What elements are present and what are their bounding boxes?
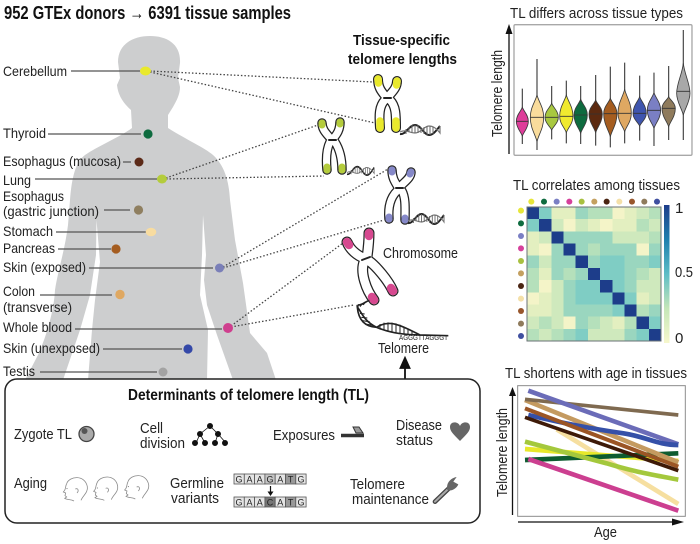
- icon: germline sequence change: G: [297, 474, 305, 484]
- DNA helix: purple chromosome: [408, 214, 444, 224]
- y axis: telomere length (violin): [490, 24, 512, 154]
- DNA helix: yellow chromosome: [400, 125, 440, 135]
- label: Aging: Aging: [14, 475, 47, 492]
- icon: heart: [450, 422, 470, 441]
- y axis: telomere length (violin): Telomere length: [490, 50, 506, 137]
- label: Stomach: Stomach: [3, 223, 53, 239]
- dotted connector lines: [150, 71, 388, 327]
- heatmap: [518, 199, 693, 347]
- label: Testis: Testis: [3, 363, 35, 379]
- heading: tissue-specific telomere lengths: [348, 33, 457, 68]
- icon: cigarette: [341, 427, 364, 436]
- tissue labels and markers: [3, 63, 233, 379]
- label: Cell division: [140, 420, 185, 452]
- icon: germline sequence change: A: [257, 474, 263, 484]
- y axis: telomere length (lines): Telomere length: [495, 408, 511, 497]
- label: Zygote TL: Zygote TL: [14, 426, 72, 443]
- x axis: age: [518, 518, 684, 541]
- heading: tissue-specific telomere lengths: telomere lengths: [348, 52, 457, 68]
- label: Lung: Lung: [3, 172, 31, 188]
- label: transverse: (transverse): [3, 299, 72, 315]
- icon: germline sequence change: G: [235, 474, 243, 484]
- colour bar labels: [675, 200, 693, 347]
- icon: germline sequence change: T: [288, 474, 294, 484]
- label: Telomere maintenance: maintenance: [352, 491, 429, 508]
- arrow: determinants to telomere: [400, 358, 410, 380]
- panel: determinants of telomere length: [5, 379, 480, 523]
- icon: germline sequence change: C: [267, 498, 274, 508]
- telomere sequence: AGGGTTAGGGT: [399, 335, 449, 342]
- DNA helix: lime chromosome: [347, 167, 374, 175]
- icon: zygote: [79, 426, 94, 442]
- colour bar: [664, 205, 670, 343]
- x axis: age: Age: [594, 524, 617, 541]
- label: gastric junction: (gastric junction): [3, 203, 99, 219]
- icon: germline sequence change: A: [246, 474, 253, 484]
- label: Telomere: Telomere: [378, 340, 429, 357]
- label: Skin (unexposed): Skin (unexposed): [3, 340, 100, 356]
- label: Germline variants: [170, 475, 224, 507]
- line chart: [518, 386, 685, 516]
- icon: germline sequence change: A: [277, 498, 283, 508]
- label: Telomere maintenance: Telomere: [350, 476, 405, 493]
- y axis: telomere length (lines): [495, 387, 516, 515]
- label: Disease status: status: [396, 432, 433, 449]
- icon: germline sequence change: G: [235, 498, 243, 508]
- label: Chromosome: Chromosome: [383, 245, 458, 262]
- icon: wrench: [435, 477, 458, 502]
- chromosome: purple: [389, 170, 411, 220]
- label: Disease status: Disease: [396, 417, 442, 434]
- label: Cerebellum: Cerebellum: [3, 63, 67, 79]
- icon: germline sequence change: A: [246, 498, 253, 508]
- label: Thyroid: Thyroid: [3, 125, 46, 141]
- label: Esophagus: Esophagus: [3, 188, 64, 204]
- chromosome: pink: [347, 233, 393, 300]
- icon: germline sequence change: T: [288, 498, 294, 508]
- label: Germline variants: variants: [171, 490, 219, 507]
- label: Cell division: Cell: [140, 420, 163, 437]
- icon: germline sequence change: [234, 474, 306, 508]
- colour legend dots: [518, 199, 660, 339]
- icon: germline sequence change: G: [297, 498, 305, 508]
- icon: cell division tree: [192, 423, 228, 446]
- label: Telomere maintenance: [350, 476, 429, 508]
- label: Esophagus (mucosa): Esophagus (mucosa): [3, 153, 121, 169]
- label: Whole blood: Whole blood: [3, 319, 72, 335]
- colour bar labels: 0.5: [675, 264, 693, 281]
- chromosome: yellow: [378, 79, 397, 128]
- title: violin chart: TL differs across tissue types: [510, 5, 683, 22]
- panel heading: Determinants of telomere length (TL): [128, 387, 369, 404]
- telomere helix: [357, 301, 448, 336]
- label: Germline variants: Germline: [170, 475, 224, 492]
- icon: germline sequence change: A: [257, 498, 263, 508]
- icon: germline sequence change: A: [277, 474, 283, 484]
- label: Exposures: Exposures: [273, 427, 335, 444]
- heading: tissue-specific telomere lengths: Tissue-specific: [353, 33, 450, 49]
- icon: germline sequence change: G: [266, 474, 274, 484]
- tissue dots: [111, 66, 233, 376]
- label: Colon: Colon: [3, 283, 35, 299]
- colour bar labels: 0: [675, 330, 683, 347]
- body silhouette: [25, 36, 276, 380]
- violin chart: [514, 25, 692, 155]
- label: Disease status: [396, 417, 442, 449]
- label: Skin (exposed): Skin (exposed): [3, 259, 86, 275]
- chromosome: lime: [322, 122, 342, 170]
- title: heatmap: TL correlates among tissues: [513, 177, 680, 194]
- label: Pancreas: Pancreas: [3, 240, 55, 256]
- icon: aging heads: [63, 476, 149, 501]
- colour bar labels: 1: [675, 200, 683, 217]
- title: 952 GTEx donors → 6391 tissue samples: [4, 3, 291, 23]
- label: Cell division: division: [140, 435, 185, 452]
